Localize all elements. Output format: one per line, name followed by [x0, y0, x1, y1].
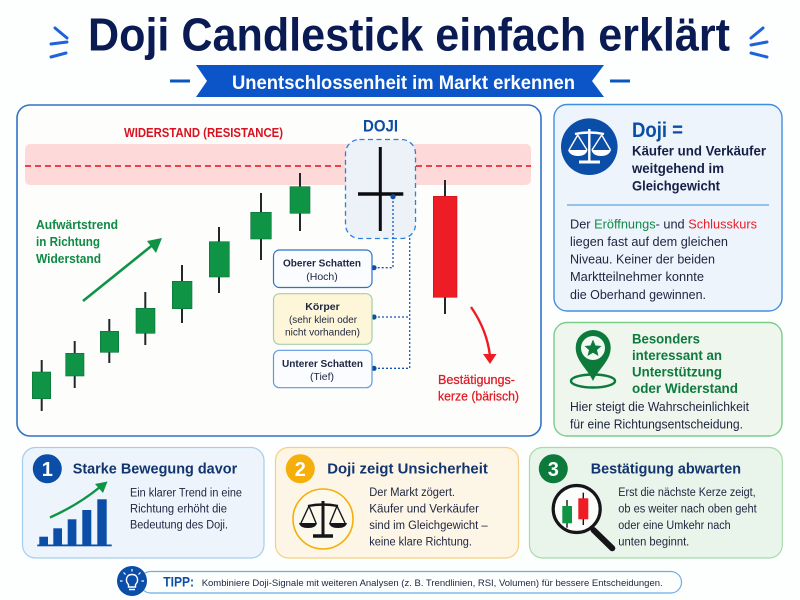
panel: step 2 [276, 448, 518, 558]
label: lower shadow [274, 350, 372, 388]
step 3 text: unten beginnt. [618, 536, 689, 548]
icon: rising bars with arrow [37, 482, 112, 546]
step 2 text: Der Markt zögert. [369, 487, 455, 499]
subtitle ribbon [170, 65, 630, 97]
step 2 heading: Doji zeigt Unsicherheit [327, 462, 488, 478]
subtitle ribbon: Unentschlossenheit im Markt erkennen [232, 72, 575, 94]
step 2 text: Käufer und Verkäufer [369, 504, 479, 516]
support heading [632, 330, 738, 396]
tip bar [117, 566, 682, 596]
resistance label: WIDERSTAND (RESISTANCE) [124, 126, 283, 140]
step 3 heading: Bestätigung abwarten [591, 462, 741, 478]
doji candle highlight [346, 140, 416, 238]
label: lower shadow: (Tief) [310, 371, 334, 383]
label: upper shadow: Oberer Schatten [283, 258, 361, 270]
arrow: bearish [471, 307, 496, 364]
step 1 text: Ein klarer Trend in eine [130, 488, 242, 500]
definition text: Niveau. Keiner der beiden [570, 252, 715, 266]
green candles uptrend [32, 173, 310, 411]
step 3 text: ob es weiter nach oben geht [618, 504, 757, 516]
step 2 text [369, 487, 488, 548]
definition text: Der Eröffnungs- und Schlusskurs [570, 218, 757, 232]
support text: Hier steigt die Wahrscheinlichkeit [570, 400, 750, 414]
definition text: Marktteilnehmer konnte [570, 270, 704, 284]
tip text: Kombiniere Doji-Signale mit weiteren Analysen (z. B. Trendlinien, RSI, Volumen) für bessere Entscheidungen. [202, 578, 663, 589]
label: upper shadow [274, 250, 372, 288]
step 2 text: sind im Gleichgewicht – [369, 520, 488, 532]
label: body [274, 294, 372, 344]
definition text [570, 218, 757, 302]
uptrend label: Aufwärtstrend [36, 218, 118, 232]
red confirmation candle [433, 180, 457, 314]
support heading: Besonders [632, 330, 700, 346]
uptrend label: Widerstand [36, 252, 101, 266]
uptrend label [36, 218, 118, 266]
connectors [371, 194, 410, 371]
number badge 3 [539, 454, 568, 483]
label: body: Körper [305, 301, 340, 313]
step 1 heading: Starke Bewegung davor [73, 462, 238, 478]
icon: light bulb [117, 566, 147, 596]
icon: location pin with star [571, 330, 615, 388]
confirmation label [438, 373, 519, 404]
step 3 text: Erst die nächste Kerze zeigt, [618, 487, 756, 499]
support heading: Unterstützung [632, 364, 722, 380]
confirmation label: kerze (bärisch) [438, 390, 519, 404]
number badge 2: 2 [295, 459, 306, 481]
number badge 1 [33, 454, 62, 483]
step 1 text: Bedeutung des Doji. [130, 520, 228, 532]
step 1 text [130, 488, 242, 532]
number badge 1: 1 [42, 459, 53, 481]
step 3 text [618, 487, 757, 548]
panel: step 1 [22, 448, 264, 558]
uptrend label: in Richtung [36, 235, 100, 249]
support heading: oder Widerstand [632, 380, 738, 396]
definition heading [631, 119, 767, 194]
confirmation label: Bestätigungs- [438, 373, 515, 387]
step 3 text: oder eine Umkehr nach [618, 520, 731, 532]
label: upper shadow: (Hoch) [306, 271, 338, 283]
panel: doji definition [554, 104, 782, 311]
label: lower shadow: Unterer Schatten [282, 358, 363, 370]
panel: candlestick chart [17, 105, 541, 436]
definition heading: weitgehend im [631, 160, 724, 176]
panel: support or resistance [554, 322, 782, 436]
label: body: (sehr klein oder [289, 314, 357, 326]
tip label: TIPP: [163, 574, 194, 590]
arrow: uptrend [83, 238, 162, 301]
support text: für eine Richtungsentscheidung. [570, 418, 743, 432]
step 2 text: keine klare Richtung. [369, 536, 472, 548]
number badge 2 [286, 454, 315, 483]
resistance zone [25, 144, 531, 185]
label: body: nicht vorhanden) [285, 326, 360, 338]
definition text: liegen fast auf dem gleichen [570, 235, 728, 249]
step 1 text: Richtung erhöht die [130, 504, 227, 516]
icon: left title sparks [51, 28, 67, 57]
icon: scale in circle [293, 489, 353, 549]
support text [570, 400, 750, 432]
support heading: interessant an [632, 347, 722, 363]
icon: magnifier with candles [553, 486, 612, 548]
title: Doji Candlestick einfach erklärt [88, 8, 730, 60]
definition heading: Käufer und Verkäufer [632, 142, 767, 158]
definition heading: Doji = [632, 119, 683, 142]
icon: right title sparks [751, 28, 767, 57]
definition text: die Oberhand gewinnen. [570, 288, 706, 302]
number badge 3: 3 [548, 459, 559, 481]
doji label: DOJI [363, 116, 398, 136]
icon: balance scale [561, 118, 618, 175]
panel: step 3 [530, 448, 782, 558]
definition heading: Gleichgewicht [632, 178, 720, 194]
